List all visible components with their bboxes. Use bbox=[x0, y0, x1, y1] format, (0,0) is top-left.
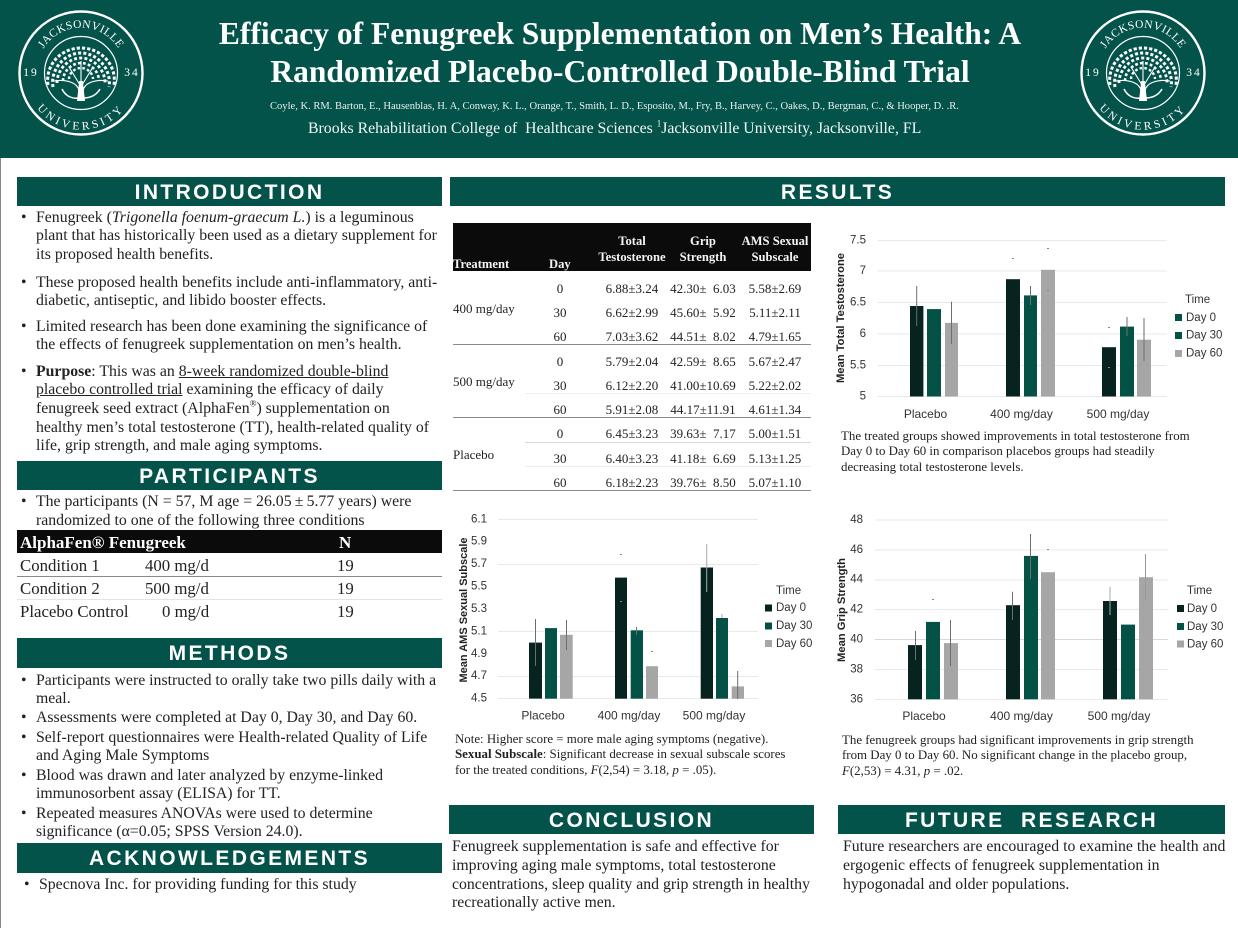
bullet: blood: Blood was drawn and later analyzed by enzyme-linked bbox=[36, 767, 383, 784]
legend: Day 60 bbox=[1187, 638, 1223, 650]
bullet: definition: its proposed health benefits. bbox=[36, 246, 213, 263]
row: placebo control: Placebo Control bbox=[20, 602, 129, 621]
category labels: Placebo bbox=[904, 407, 948, 421]
table header: Strength bbox=[680, 250, 726, 264]
row: placebo control bbox=[20, 602, 354, 621]
caption: AMS chart: for the treated conditions, F(2,54) = 3.18, p = .05). bbox=[455, 763, 716, 777]
group labels bbox=[453, 301, 515, 462]
grip strength column: 45.60± 5.92 bbox=[670, 305, 736, 320]
AMS sexual subscale column: 5.58±2.69 bbox=[749, 281, 801, 296]
icon: right university seal: JACKSONVILLE bbox=[1100, 20, 1186, 48]
y axis ticks: 5.5 bbox=[471, 580, 487, 592]
day column: 30 bbox=[554, 378, 566, 393]
caption: grip chart: from Day 0 to Day 60. No significant change in the placebo group, bbox=[842, 748, 1187, 762]
text: participants bullet bbox=[21, 493, 411, 531]
row: condition 2: Condition 2 bbox=[20, 579, 100, 598]
text: future research bbox=[843, 838, 1226, 893]
AMS sexual subscale column: 4.61±1.34 bbox=[749, 402, 801, 417]
authors: Coyle, K. RM. Barton, E., Hausenblas, H. A, Conway, K. L., Orange, T., Smith, L. D., Esposito, M., Fry, B., Harvey, C., Oakes, D., Bergman, C., & Hooper, D. .R. bbox=[270, 101, 959, 112]
table: conditions bbox=[17, 530, 442, 621]
text: future research: ergogenic effects of fenugreek supplementation in bbox=[843, 857, 1160, 874]
bullet: benefits: These proposed health benefits include anti-inflammatory, anti- bbox=[36, 274, 437, 291]
total testosterone column bbox=[606, 281, 658, 490]
table header: Grip bbox=[690, 234, 716, 248]
bullet: purpose: fenugreek seed extract (AlphaFen®) supplementation on bbox=[36, 399, 390, 417]
caption: testosterone chart: Day 0 to Day 60 in comparison placebos groups had steadily bbox=[841, 444, 1155, 458]
icon: left university seal: JACKSONVILLE bbox=[38, 20, 124, 48]
bars bbox=[529, 568, 744, 699]
heading: conclusion: CONCLUSION bbox=[549, 809, 714, 832]
text: conclusion: improving aging male symptoms, total testosterone bbox=[452, 857, 776, 874]
text: future research: hypogonadal and older populations. bbox=[843, 876, 1069, 893]
y axis ticks: 4.5 bbox=[471, 693, 487, 705]
text: conclusion bbox=[452, 838, 810, 911]
heading: results: RESULTS bbox=[781, 181, 894, 204]
y axis ticks: 5.5 bbox=[850, 360, 866, 372]
AMS sexual subscale column: 5.67±2.47 bbox=[749, 354, 801, 369]
caption: AMS chart: Sexual Subscale: Significant decrease in sexual subscale scores bbox=[455, 747, 785, 761]
total testosterone column: 6.62±2.99 bbox=[606, 305, 658, 320]
day column: 60 bbox=[554, 475, 566, 490]
legend: Day 30 bbox=[776, 620, 812, 632]
y axis ticks: 6 bbox=[860, 328, 866, 340]
table: results bbox=[453, 223, 811, 491]
category labels: 500 mg/day bbox=[683, 709, 745, 723]
bullet: dosing bbox=[21, 672, 436, 709]
y axis ticks: 5.9 bbox=[471, 536, 487, 548]
total testosterone column: 6.88±3.24 bbox=[606, 281, 658, 296]
table header: Testosterone bbox=[598, 250, 666, 264]
y axis ticks: 6.1 bbox=[471, 513, 487, 525]
icon: left university seal: 34 bbox=[124, 67, 140, 79]
y axis ticks: 5 bbox=[860, 390, 866, 402]
category labels: 400 mg/day bbox=[990, 709, 1053, 723]
day column: 0 bbox=[557, 426, 563, 441]
heading: methods bbox=[17, 638, 442, 668]
icon: right university seal: 34 bbox=[1186, 67, 1202, 79]
bullet: assessments: Assessments were completed at Day 0, Day 30, and Day 60. bbox=[36, 709, 417, 726]
y axis ticks: 4.7 bbox=[471, 670, 487, 682]
day column: 60 bbox=[554, 329, 566, 344]
legend: Time bbox=[1185, 294, 1210, 306]
AMS sexual subscale column: 5.00±1.51 bbox=[749, 426, 801, 441]
category labels: Placebo bbox=[521, 709, 565, 723]
header band bbox=[0, 0, 1238, 158]
table header: AlphaFen® Fenugreek bbox=[20, 533, 186, 552]
day column: 0 bbox=[557, 354, 563, 369]
y axis ticks: 6.5 bbox=[850, 296, 866, 308]
text: conclusion: recreationally active men. bbox=[452, 894, 616, 911]
chart: mean AMS sexual subscale bbox=[458, 513, 812, 723]
table: conditions: 0 mg/d bbox=[162, 602, 209, 621]
total testosterone column: 6.45±3.23 bbox=[606, 426, 658, 441]
grip strength column: 41.00±10.69 bbox=[670, 378, 736, 393]
category labels: 400 mg/day bbox=[598, 709, 660, 723]
table header bbox=[453, 223, 811, 271]
chart: mean total testosterone bbox=[835, 234, 1222, 421]
bullet: benefits: diabetic, antiseptic, and libido booster effects. bbox=[36, 292, 326, 309]
text: acknowledgements: Specnova Inc. for providing funding for this study bbox=[39, 876, 357, 893]
total testosterone column: 5.91±2.08 bbox=[606, 402, 658, 417]
y axis ticks: 44 bbox=[850, 574, 864, 586]
error bars bbox=[916, 534, 1146, 666]
bullet: definition: plant that has historically been used as a dietary supplement for bbox=[36, 227, 437, 244]
title bbox=[219, 16, 1021, 89]
text: methods bullets bbox=[22, 672, 436, 840]
y axis ticks: 5.7 bbox=[471, 558, 487, 570]
table header: N bbox=[339, 533, 351, 552]
caption: testosterone chart: decreasing total testosterone levels. bbox=[841, 460, 1024, 474]
y axis title: Mean Total Testosterone bbox=[835, 253, 847, 383]
caption: AMS chart: Note: Higher score = more male aging symptoms (negative). bbox=[455, 732, 768, 746]
left edge rule bbox=[0, 158, 1, 928]
legend: Day 30 bbox=[1187, 621, 1223, 633]
text: participants bullet: randomized to one of the following three conditions bbox=[36, 512, 365, 529]
legend: Time bbox=[1187, 585, 1212, 597]
heading: methods: METHODS bbox=[169, 642, 290, 665]
category labels: 400 mg/day bbox=[990, 407, 1053, 421]
bullet: dosing: meal. bbox=[36, 690, 71, 707]
bullet: statistics: Repeated measures ANOVAs were used to determine bbox=[36, 805, 373, 822]
category labels: Placebo bbox=[902, 709, 946, 723]
legend: Day 60 bbox=[1186, 348, 1222, 360]
bullet: benefits bbox=[21, 274, 437, 311]
AMS sexual subscale column: 5.07±1.10 bbox=[749, 475, 801, 490]
AMS sexual subscale column: 5.11±2.11 bbox=[749, 305, 801, 320]
bullet: limited research bbox=[21, 318, 427, 355]
grip strength column: 42.59± 8.65 bbox=[670, 354, 736, 369]
y axis ticks bbox=[850, 514, 864, 705]
day column: 60 bbox=[554, 402, 566, 417]
bullet: statistics bbox=[21, 805, 373, 842]
caption: testosterone chart bbox=[841, 428, 1190, 474]
title: Efficacy of Fenugreek Supplementation on Men’s Health: A bbox=[219, 16, 1021, 51]
legend: Day 30 bbox=[1186, 330, 1222, 342]
AMS sexual subscale column: 5.13±1.25 bbox=[749, 451, 801, 466]
error bars bbox=[536, 544, 738, 699]
bullet: definition: Fenugreek (Trigonella foenum-graecum L.) is a leguminous bbox=[36, 209, 414, 226]
bullet: questionnaires bbox=[21, 729, 427, 766]
bars bbox=[910, 270, 1151, 396]
text: conclusion: Fenugreek supplementation is safe and effective for bbox=[452, 838, 779, 855]
legend bbox=[1175, 294, 1222, 360]
caption: grip chart: The fenugreek groups had significant improvements in grip strength bbox=[842, 732, 1194, 746]
table header: AMS Sexual bbox=[742, 234, 808, 248]
table header: Total bbox=[618, 234, 646, 248]
AMS sexual subscale column bbox=[748, 281, 802, 490]
bullet: blood: immunosorbent assay (ELISA) for TT. bbox=[36, 785, 281, 802]
bars bbox=[908, 556, 1153, 699]
y axis title: Mean AMS Sexual Subscale bbox=[458, 538, 470, 682]
y axis ticks bbox=[850, 234, 866, 402]
bullet: purpose: placebo controlled trial examining the efficacy of daily bbox=[36, 381, 384, 398]
bullet: purpose: healthy men’s total testosterone (TT), health-related quality of bbox=[36, 419, 429, 436]
day column: 30 bbox=[554, 305, 566, 320]
category labels bbox=[902, 709, 1150, 723]
group labels: Placebo bbox=[453, 447, 494, 462]
category labels bbox=[521, 709, 745, 723]
caption: grip chart bbox=[842, 732, 1194, 778]
day column bbox=[554, 281, 566, 490]
total testosterone column: 6.12±2.20 bbox=[606, 378, 658, 393]
table header: Day bbox=[549, 257, 571, 271]
title: Randomized Placebo-Controlled Double-Blind Trial bbox=[270, 54, 970, 89]
legend: Day 60 bbox=[776, 638, 812, 650]
heading: future research: FUTURE RESEARCH bbox=[905, 809, 1158, 832]
heading: participants: PARTICIPANTS bbox=[139, 465, 320, 488]
group labels: 400 mg/day bbox=[453, 301, 515, 316]
y axis ticks: 4.9 bbox=[471, 648, 487, 660]
heading: acknowledgements: ACKNOWLEDGEMENTS bbox=[89, 847, 370, 870]
legend: Day 0 bbox=[1186, 312, 1216, 324]
text: participants bullet: The participants (N = 57, M age = 26.05 ± 5.77 years) were bbox=[36, 493, 411, 510]
group labels: 500 mg/day bbox=[453, 374, 515, 389]
grip strength column: 42.30± 6.03 bbox=[670, 281, 736, 296]
day column: 0 bbox=[557, 281, 563, 296]
y axis ticks: 42 bbox=[850, 604, 863, 616]
table header bbox=[17, 530, 442, 553]
table header: Subscale bbox=[752, 250, 798, 264]
day column: 30 bbox=[554, 451, 566, 466]
heading: results bbox=[450, 177, 1225, 206]
legend bbox=[1177, 585, 1223, 650]
caption: AMS chart bbox=[455, 732, 785, 777]
row: condition 1 bbox=[20, 556, 354, 575]
bullet: statistics: significance (α=0.05; SPSS Version 24.0). bbox=[36, 823, 303, 840]
caption: testosterone chart: The treated groups showed improvements in total testosterone from bbox=[841, 428, 1190, 442]
heading: introduction: INTRODUCTION bbox=[135, 181, 324, 204]
text: future research: Future researchers are encouraged to examine the health and bbox=[843, 838, 1225, 855]
bullet: purpose: life, grip strength, and male aging symptoms. bbox=[36, 437, 322, 454]
heading: future research bbox=[838, 805, 1225, 834]
AMS sexual subscale column: 4.79±1.65 bbox=[749, 329, 801, 344]
total testosterone column: 7.03±3.62 bbox=[606, 329, 658, 344]
icon: right university seal: UNIVERSITY bbox=[1100, 103, 1184, 130]
bullet: questionnaires: Self-report questionnaires were Health-related Quality of Life bbox=[36, 729, 427, 746]
heading: participants bbox=[17, 461, 442, 490]
row: condition 2 bbox=[20, 579, 354, 598]
icon: left university seal: 19 bbox=[23, 67, 39, 79]
row: condition 1: Condition 1 bbox=[20, 556, 100, 575]
legend: Day 0 bbox=[1187, 603, 1217, 615]
bullet: limited research: Limited research has been done examining the significance of bbox=[36, 318, 427, 335]
table header: Treatment bbox=[453, 257, 509, 271]
icon: right university seal: 19 bbox=[1085, 67, 1101, 79]
y axis ticks: 7 bbox=[860, 265, 866, 277]
affiliation: Brooks Rehabilitation College of Healthcare Sciences 1Jacksonville University, Jacksonville, FL bbox=[308, 119, 921, 137]
text: conclusion: concentrations, sleep quality and grip strength in healthy bbox=[452, 876, 810, 893]
category labels bbox=[904, 407, 1149, 421]
icon: right university seal bbox=[1080, 10, 1206, 136]
bullet: blood bbox=[21, 767, 383, 804]
table: conditions: 500 mg/d bbox=[145, 579, 209, 598]
y axis title: Mean Grip Strength bbox=[836, 558, 848, 662]
heading: introduction bbox=[17, 177, 442, 206]
grip strength column: 44.51± 8.02 bbox=[670, 329, 736, 344]
y axis ticks: 40 bbox=[850, 634, 863, 646]
grip strength column: 44.17±11.91 bbox=[670, 402, 736, 417]
text: introduction bullets bbox=[22, 209, 437, 454]
bullet: purpose: Purpose: This was an 8-week randomized double-blind bbox=[36, 363, 388, 380]
grip strength column: 39.76± 8.50 bbox=[670, 475, 736, 490]
error bars bbox=[917, 248, 1144, 368]
legend: Time bbox=[776, 585, 801, 597]
category labels: 500 mg/day bbox=[1088, 709, 1150, 723]
legend: Day 0 bbox=[776, 602, 806, 614]
total testosterone column: 6.40±3.23 bbox=[606, 451, 658, 466]
row lines bbox=[453, 344, 811, 491]
bullet: limited research: the effects of fenugreek supplementation on men’s health. bbox=[36, 336, 402, 353]
bullet: questionnaires: and Aging Male Symptoms bbox=[36, 747, 209, 764]
table: conditions: 400 mg/d bbox=[145, 556, 209, 575]
caption: grip chart: F(2,53) = 4.31, p = .02. bbox=[842, 764, 963, 778]
bullet: dosing: Participants were instructed to orally take two pills daily with a bbox=[36, 672, 436, 689]
category labels: 500 mg/day bbox=[1087, 407, 1149, 421]
y axis ticks: 48 bbox=[850, 514, 863, 526]
AMS sexual subscale column: 5.22±2.02 bbox=[749, 378, 801, 393]
y axis ticks: 38 bbox=[850, 663, 863, 675]
y axis ticks: 36 bbox=[850, 693, 863, 705]
bullet: definition bbox=[21, 209, 437, 265]
y axis ticks: 5.1 bbox=[471, 625, 487, 637]
total testosterone column: 5.79±2.04 bbox=[606, 354, 658, 369]
grip strength column bbox=[670, 281, 736, 490]
y axis ticks: 7.5 bbox=[850, 234, 866, 246]
table: conditions: 19 bbox=[337, 556, 354, 575]
legend bbox=[765, 585, 812, 650]
icon: left university seal bbox=[18, 10, 144, 136]
chart: mean grip strength bbox=[836, 514, 1223, 723]
y axis ticks: 46 bbox=[850, 544, 863, 556]
heading: conclusion bbox=[449, 805, 814, 834]
table: conditions: 19 bbox=[337, 602, 354, 621]
total testosterone column: 6.18±2.23 bbox=[606, 475, 658, 490]
y axis ticks: 5.3 bbox=[471, 603, 487, 615]
grip strength column: 41.18± 6.69 bbox=[670, 451, 736, 466]
icon: left university seal: UNIVERSITY bbox=[38, 103, 122, 130]
grip strength column: 39.63± 7.17 bbox=[670, 426, 736, 441]
bullet: purpose bbox=[21, 363, 429, 456]
table: conditions: 19 bbox=[337, 579, 354, 598]
heading: acknowledgements bbox=[17, 843, 442, 873]
y axis ticks bbox=[471, 513, 487, 705]
